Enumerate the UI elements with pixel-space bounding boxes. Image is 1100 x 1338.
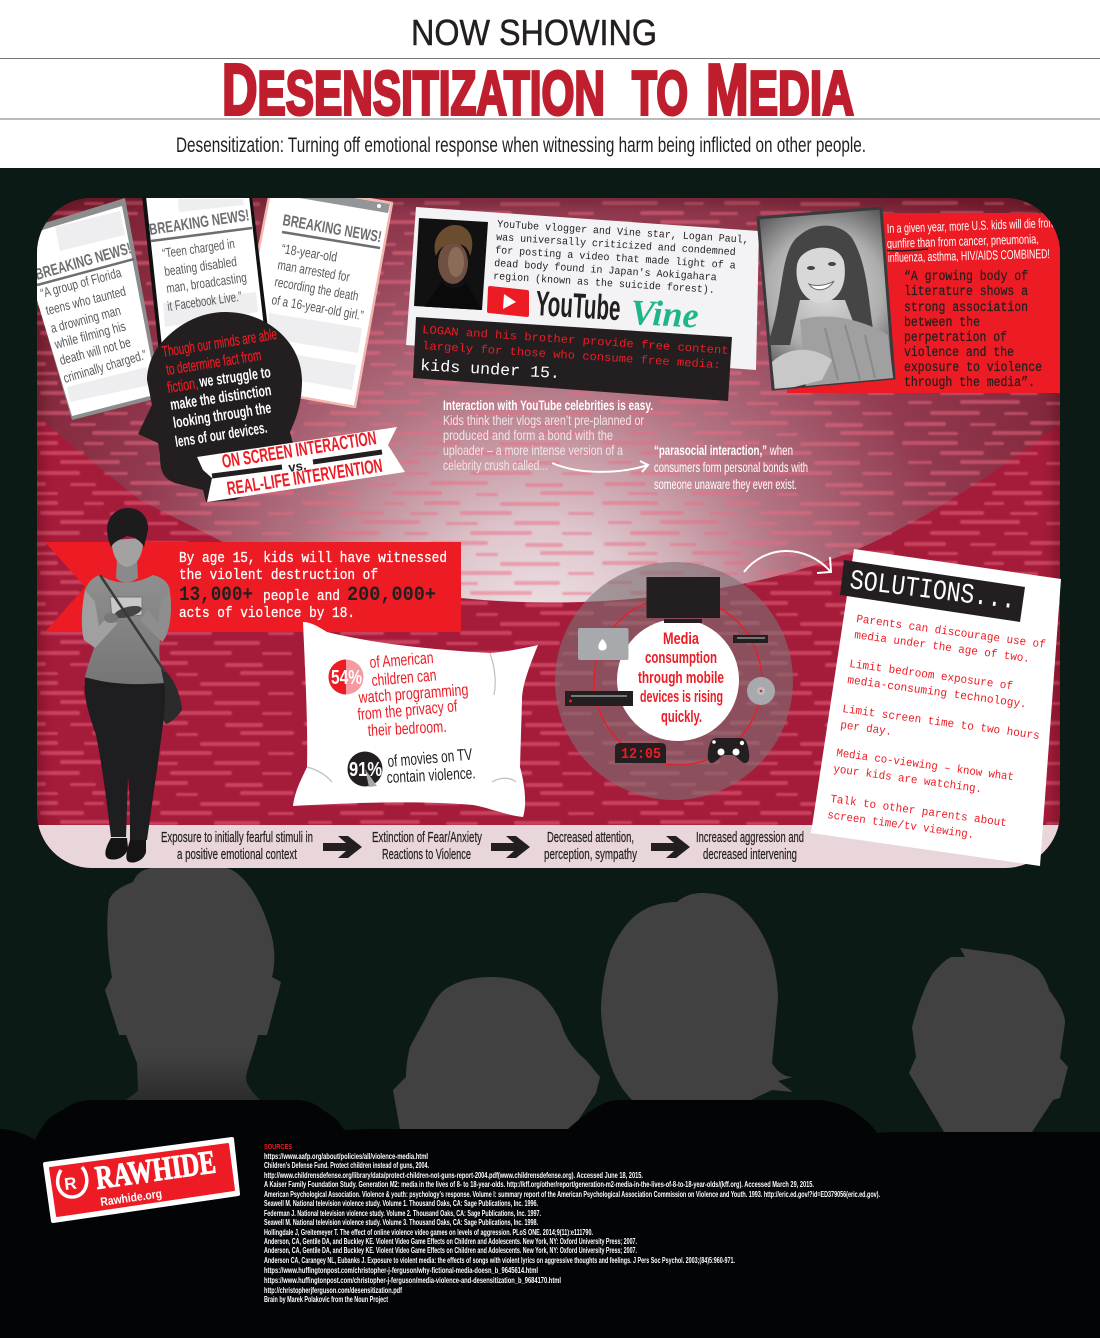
phone 1: Florida teens: criminally charged.”: [62, 347, 148, 386]
phone 2: teen charged: beating disabled: [163, 254, 238, 279]
phone 2: teen charged: BREAKING NEWS!: [148, 207, 250, 239]
hands: [113, 604, 143, 620]
screen edge shadow: [37, 198, 1060, 868]
ribbon: violence statistics: people and: [263, 589, 340, 605]
text block: YouTube celebrities: celebrity crush called...: [443, 457, 548, 473]
YouTube wordmark: YouTube: [535, 284, 622, 328]
pie chart: 54 percent: [328, 660, 364, 694]
phone 1: Florida teens: while filming his: [52, 318, 127, 352]
silhouette head 3: [601, 893, 793, 1100]
ribbon: violence statistics: [45, 542, 461, 632]
white centre circle: quickly.: [661, 707, 702, 726]
banner: on screen vs real life: vs.: [287, 458, 307, 475]
phone 2: teen charged: “Teen charged in: [161, 236, 236, 261]
quote: growing body of literature: [904, 270, 1042, 391]
head silhouette callout: to determine fact from: [165, 347, 262, 379]
text: movies on TV: contain violence.: [386, 764, 476, 787]
phone 2: teen charged: it Facebook Live.”: [166, 289, 243, 314]
header band: [0, 0, 1100, 168]
source citations: Anderson, CA, Gentile DA, and Buckley KE. Violent Video Game Effects on Children and Adolescents. New York, NY: Oxford University Press; 2007.: [264, 1246, 637, 1255]
arrow: to parasocial interaction: [552, 461, 648, 472]
title: TO: [632, 60, 688, 128]
silhouette head 4: [909, 948, 1068, 1132]
head silhouette callout: fiction,: [166, 375, 199, 397]
ribbon: violence statistics: acts of violence by 18.: [179, 606, 355, 622]
source citations: Seawell M. National television violence study. Volume 3. Thousand Oaks, CA: Sage Publications, Inc. 1998.: [264, 1218, 538, 1227]
quote: growing body of literature: “A growing body of: [904, 270, 1028, 285]
white centre circle: Media: [663, 629, 699, 648]
bag: [160, 668, 182, 724]
shoes: [105, 838, 128, 860]
solutions list: screen time/tv viewing.: [826, 809, 975, 842]
silhouette head 2: [393, 977, 600, 1130]
source citations: Children’s Defense Fund. Protect children instead of guns, 2004.: [264, 1161, 429, 1170]
pie chart: 54 percent: 54%: [331, 667, 362, 689]
step 2 text: Extinction of Fear/Anxiety: [372, 830, 482, 846]
source citations: http://christopherjferguson.com/desensitization.pdf: [264, 1286, 402, 1295]
banner: on screen vs real life: ON SCREEN INTERACTION: [221, 428, 378, 473]
ribbon: violence statistics: 200,000+: [347, 584, 436, 607]
source citations: Federman J. National television violence study. Volume 2. Thousand Oaks, CA: Sage Publications, Inc. 1997.: [264, 1209, 541, 1218]
sources list: [264, 1142, 880, 1304]
cinema screen: [37, 198, 1060, 868]
arms: [82, 590, 117, 648]
card text: [493, 219, 749, 297]
arrow 2: [491, 836, 530, 858]
text block: YouTube celebrities: produced and form a bond with the: [443, 427, 613, 443]
white centre circle: [617, 619, 739, 741]
shirt: [85, 575, 170, 684]
source citations: Seawell M. National television violence study. Volume 1. Thousand Oaks, CA: Sage Publications, Inc. 1996.: [264, 1199, 538, 1208]
panel: solutions note: [811, 549, 1061, 866]
black caption: kids under 15.: [420, 357, 561, 383]
text: American children: [357, 649, 469, 740]
step 1 text: [161, 830, 313, 863]
Vine wordmark: Vine: [630, 292, 700, 336]
bag strap: [100, 575, 165, 672]
title: DESENSITIZATION: [222, 50, 605, 130]
solutions list: your kids are watching.: [832, 763, 983, 796]
quote: growing body of literature: exposure to violence: [904, 361, 1042, 376]
panel: media devices circle: [555, 562, 793, 800]
Rawhide logo: [45, 1139, 238, 1221]
phone 1: Florida teens: BREAKING NEWS!: [33, 240, 133, 284]
source citations: Anderson, CA, Gentile DA, and Buckley KE. Violent Video Game Effects on Children and Adolescents. New York, NY: Oxford University Press; 2007.: [264, 1237, 637, 1246]
card text: dead body found in Japan's Aokigahara: [494, 258, 717, 284]
phone 1: Florida teens: a drowning man: [49, 303, 122, 336]
black caption: LOGAN and his brother provide free content: [422, 324, 729, 358]
statistic: gunfire: [887, 218, 1053, 263]
phone 1: Florida teens: death will not be: [58, 335, 132, 368]
text block: parasocial interaction: “parasocial interaction,” when: [654, 442, 793, 458]
text: American children: watch programming: [357, 681, 469, 707]
source citations: https://www.huffingtonpost.com/christopher-j-ferguson/media-violence-and-desensitization_b_9684170.html: [264, 1276, 561, 1285]
quote: growing body of literature: through the media”.: [904, 376, 1035, 391]
solutions list: Limit bedroom exposure of: [848, 658, 1014, 693]
icon: small media box: [733, 635, 768, 643]
source citations: Anderson CA, Carangey NL, Eubanks J. Exposure to violent media: the effects of songs with violent lyrics on aggressive thoughts and feelings. J Pers Soc Psychol. 2003;(84)5:960-971.: [264, 1256, 735, 1265]
card text: region (known as the suicide forest).: [493, 271, 715, 297]
phone 2: teen charged: man, broadcasting: [165, 270, 248, 296]
step 4 text: Increased aggression and: [696, 830, 804, 846]
banner: on screen vs real life: REAL-LIFE INTERVENTION: [226, 456, 384, 500]
phone 3: 18-year-old: “18-year-old: [281, 241, 338, 265]
phone 3: 18-year-old: man arrested for: [276, 257, 351, 285]
white centre circle: through mobile: [638, 668, 724, 687]
ribbon: violence statistics: 13,000+: [179, 584, 253, 607]
seat and shoulder shapes: [0, 1100, 1100, 1338]
source citations: Brain by Marek Polakovic from the Noun Project: [264, 1295, 388, 1304]
wordmark: RAWHIDE: [93, 1144, 218, 1197]
solutions list: Limit screen time to two hours: [841, 703, 1040, 743]
quote: growing body of literature: literature shows a: [904, 285, 1028, 300]
solutions list: media under the age of two.: [853, 629, 1031, 666]
text block: YouTube celebrities: Kids think their vlogs aren’t pre-planned or: [443, 412, 644, 428]
pillow panel: [293, 622, 538, 817]
card text: YouTube vlogger and Vine star, Logan Paul,: [497, 219, 749, 247]
icon: media player: [565, 691, 633, 706]
solutions list: Parents can discourage use of: [855, 613, 1047, 652]
arrow: to solutions: [744, 551, 831, 573]
white centre circle: devices is rising: [640, 687, 723, 706]
quote: growing body of literature: violence and the: [904, 346, 1014, 361]
icon: YouTube play button: [489, 288, 527, 315]
head silhouette callout: Though our minds are able: [161, 326, 278, 361]
hair: [107, 508, 148, 547]
text: movies on TV: [386, 746, 476, 787]
arrow 1: [323, 836, 362, 858]
text: American children: of American: [369, 649, 434, 672]
step 1 text: a positive emotional context: [177, 847, 297, 863]
pie chart: 91 percent: [348, 752, 382, 787]
phone 2: teen charged: [142, 198, 268, 347]
solutions list: Media co-viewing – know what: [835, 747, 1015, 784]
figure: woman with tablet: [82, 508, 182, 863]
text: American children: children can: [371, 666, 437, 690]
source citations: https://www.aafp.org/about/policies/all/violence-media.html: [264, 1152, 428, 1161]
head silhouette callout: [138, 312, 302, 502]
solutions list: media-consuming technology.: [846, 674, 1028, 712]
solutions list: per day.: [839, 719, 893, 739]
step 4 text: [696, 830, 804, 863]
ribbon: violence statistics: By age 15, kids will have witnessed: [179, 551, 447, 567]
icon: horseshoe R: R: [63, 1174, 78, 1194]
text: American children: from the privacy of: [357, 697, 458, 724]
process flow: [161, 830, 804, 863]
source citations: http://www.childrensdefense.org/library/data/protect-children-not-guns-report-2004.pdf(www.childrensdefense.org). Accessed June 18, 2015.: [264, 1171, 643, 1180]
pie chart: 91 percent: 91%: [349, 759, 382, 781]
step 2 text: Reactions to Violence: [382, 847, 471, 863]
source citations: A Kaiser Family Foundation Study. Generation M2: media in the lives of 8- to 18-year-olds. http://kff.org/other/report/generation-m2-media-in-the-lives-of-8-to-18-year-olds/(kff.org). Accessed March 29, 2015.: [264, 1180, 814, 1189]
step 2 text: [372, 830, 482, 863]
phone 3: 18-year-old: of a 16-year-old girl.”: [270, 292, 365, 323]
panel: breaking news phones: [37, 198, 394, 420]
panel: Logan Paul card: [406, 207, 759, 401]
phone 3: 18-year-old: BREAKING NEWS!: [281, 212, 383, 246]
source citations: [264, 1152, 880, 1304]
icon: television: [646, 577, 720, 623]
solutions heading: SOLUTIONS...: [848, 566, 1017, 617]
head silhouette callout: looking through the: [172, 400, 273, 432]
jeans: [85, 678, 165, 840]
step 3 text: perception, sympathy: [544, 847, 638, 863]
sources heading: SOURCES: [264, 1142, 292, 1151]
phone 3: 18-year-old: [258, 198, 394, 408]
source citations: Hollingdale J, Greitemeyer T. The effect of online violence video games on levels of aggression. PLoS ONE. 2014;9(11):e111790.: [264, 1228, 593, 1237]
tablet: [110, 597, 142, 618]
neck and face: [116, 558, 138, 582]
photo: smiling girl: [758, 208, 894, 392]
text: American children: their bedroom.: [367, 718, 447, 740]
icon: laptop: [578, 628, 628, 660]
step 3 text: Decreased attention,: [547, 830, 634, 846]
solutions list: [826, 613, 1047, 842]
device ring: [594, 597, 762, 765]
ribbon: violence statistics: the violent destruction of: [179, 568, 378, 584]
phone 1: Florida teens: [37, 198, 154, 420]
step 1 text: Exposure to initially fearful stimuli in: [161, 830, 313, 846]
card text: was universally criticized and condemned: [496, 232, 736, 259]
screen texture: [37, 198, 1060, 868]
phone 1: Florida teens: teens who taunted: [44, 284, 127, 318]
text: movies on TV: of movies on TV: [387, 746, 473, 771]
photo: Logan Paul: [414, 218, 488, 310]
card text: for posting a video that made light of a: [495, 245, 736, 273]
panel: red statistic and girl photo: [758, 208, 1060, 393]
screen base: [37, 198, 1060, 868]
icon: game controller: [708, 738, 749, 763]
projector beam: [37, 198, 1060, 602]
icon: horseshoe R: [58, 1167, 87, 1197]
text block: parasocial interaction: consumers form personal bonds with: [654, 459, 808, 475]
text block: YouTube celebrities: Interaction with YouTube celebrities is easy.: [443, 397, 653, 413]
kicker: now showing: NOW SHOWING: [411, 12, 657, 53]
step 4 text: decreased intervening: [703, 847, 797, 863]
phone 3: 18-year-old: recording the death: [273, 274, 360, 304]
quote: growing body of literature: between the: [904, 316, 980, 331]
phone 1: Florida teens: “A group of Florida: [39, 265, 123, 301]
arrow 3: [651, 836, 690, 858]
quote: growing body of literature: perpetration of: [904, 331, 1007, 346]
black caption: [413, 317, 732, 401]
banner: on screen vs real life: [197, 427, 405, 502]
statistic: gunfire: gunfire than from cancer, pneumonia,: [887, 231, 1039, 251]
white centre circle: consumption: [645, 648, 717, 667]
text block: YouTube celebrities: [443, 397, 653, 473]
silhouette head 1: [105, 863, 281, 1100]
quote: growing body of literature: strong association: [904, 301, 1028, 316]
head silhouette callout: we struggle to: [198, 364, 272, 391]
audience silhouettes: [0, 863, 1100, 1338]
black caption: largely for those who consume free media:: [422, 340, 721, 372]
text block: parasocial interaction: someone unaware they even exist.: [654, 476, 797, 492]
step 3 text: [544, 830, 638, 863]
icon: disc: [747, 677, 775, 705]
text block: YouTube celebrities: uploader – a more intense version of a: [443, 442, 623, 458]
subtitle: Desensitization: Turning off emotional response when witnessing harm being inflicted on other people.: [176, 134, 866, 157]
head silhouette callout: make the distinction: [169, 382, 272, 414]
solutions list: Talk to other parents about: [829, 793, 1008, 830]
head silhouette callout: lens of our devices.: [174, 420, 268, 451]
website: Rawhide.org: [99, 1186, 163, 1209]
bottom strip of screen: [37, 825, 1060, 868]
text block: parasocial interaction: [654, 442, 808, 492]
title: MEDIA: [706, 50, 854, 130]
icon: digital clock: 12:05: [621, 746, 661, 763]
source citations: https://www.huffingtonpost.com/christopher-j-ferguson/why-fictional-media-doesn_b_9645614.html: [264, 1266, 538, 1275]
